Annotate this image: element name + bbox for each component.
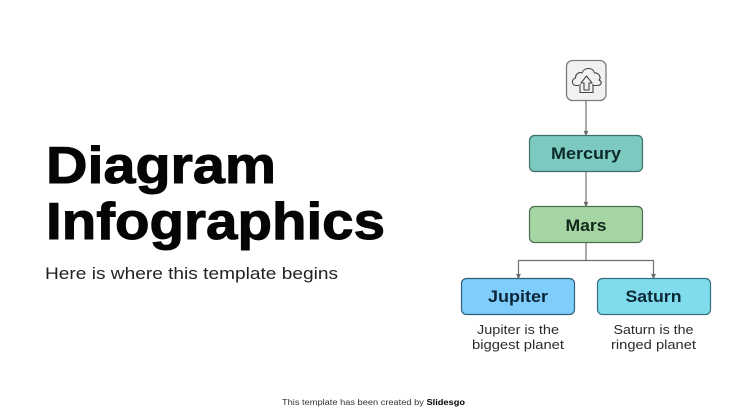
footer credit: This template has been created by Slidesgo: [282, 398, 465, 407]
title: [46, 137, 385, 251]
title: Infographics: [46, 193, 385, 251]
node: Mars: Mars: [566, 217, 606, 235]
node: Saturn: [598, 278, 710, 314]
flow diagram: [462, 60, 710, 352]
caption: Saturn: ringed planet: [611, 337, 696, 352]
title: Diagram: [46, 137, 276, 195]
node: Mercury: Mercury: [551, 145, 622, 163]
node: Jupiter: [462, 278, 574, 314]
caption: Saturn: [611, 322, 696, 352]
caption: Saturn: Saturn is the: [614, 322, 694, 337]
node: Saturn: Saturn: [626, 288, 682, 306]
node: Jupiter: Jupiter: [488, 288, 549, 306]
subtitle: Here is where this template begins: [45, 264, 338, 283]
connector arrows: [517, 101, 655, 278]
node: Mars: [530, 206, 642, 242]
caption: Jupiter: [472, 322, 564, 352]
node: Mercury: [530, 136, 642, 172]
caption: Jupiter: biggest planet: [472, 337, 564, 352]
caption: Jupiter: Jupiter is the: [477, 322, 559, 337]
icon: cloud upload: [566, 60, 606, 100]
